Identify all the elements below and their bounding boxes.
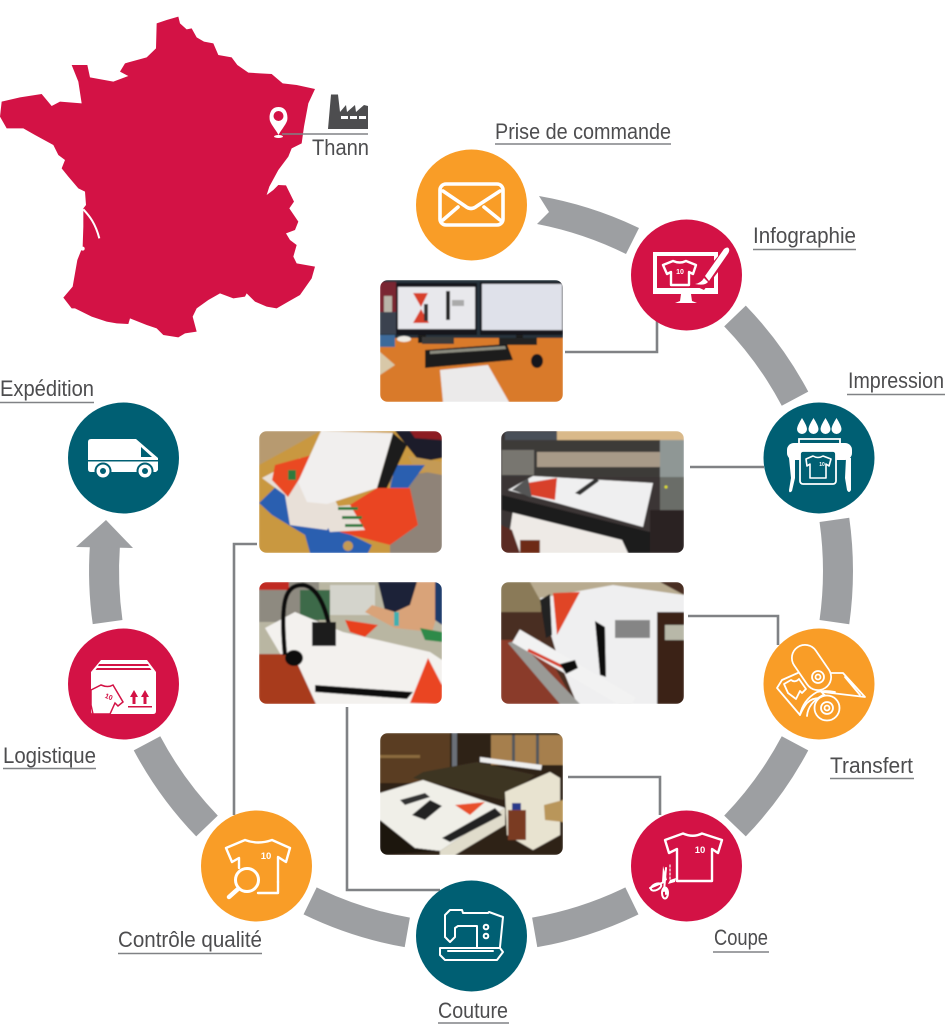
label: Logistique: Logistique: [3, 743, 96, 768]
photo: finished jerseys pile: [259, 431, 442, 553]
step: Coupe: [631, 810, 742, 922]
icon: t-shirt and scissors: 10: [695, 845, 705, 856]
label: Expédition: Expédition: [0, 376, 94, 401]
step: Couture: [416, 880, 527, 992]
icon: delivery van: [88, 439, 158, 478]
label: Infographie: Infographie: [753, 223, 856, 248]
photo: computer workstation: [380, 280, 563, 402]
photo: laser cutting table: [380, 733, 563, 855]
step: Expédition: [68, 402, 179, 514]
icon: sewing machine: [440, 910, 503, 960]
step: Transfert: [764, 628, 874, 740]
icon: box with t-shirt and arrows: 10: [104, 693, 113, 702]
label: Thann: Thann: [312, 135, 369, 160]
connector lines: [234, 320, 778, 890]
label: Transfert: Transfert: [830, 753, 913, 778]
icon: monitor with pen: 10: [676, 269, 684, 276]
photo: sewing workstation: [259, 582, 442, 704]
step: Prise de commande: [416, 150, 527, 260]
step: Impression: [764, 402, 874, 514]
label: Contrôle qualité: Contrôle qualité: [118, 927, 262, 952]
icon: t-shirt with magnifier: 10: [261, 851, 271, 862]
photo: large format printer: [501, 431, 684, 553]
icon: transfer rollers: [777, 658, 865, 720]
process ring arrows: [76, 196, 838, 932]
step: Contrôle qualité: [201, 810, 312, 922]
icon: location pin: [270, 107, 287, 138]
label: Couture: Couture: [438, 998, 508, 1023]
map of France: [0, 17, 315, 337]
step: Logistique: [68, 628, 179, 740]
icon: envelope: [440, 184, 503, 225]
step: Infographie: [631, 220, 742, 330]
label: Coupe: Coupe: [714, 925, 768, 950]
label: Prise de commande: Prise de commande: [495, 119, 671, 144]
label: Thann: [282, 134, 369, 160]
icon: printer with ink drops: 10: [819, 462, 825, 468]
icon: factory: [328, 94, 368, 129]
photo: transfer paper roll: [501, 582, 684, 704]
